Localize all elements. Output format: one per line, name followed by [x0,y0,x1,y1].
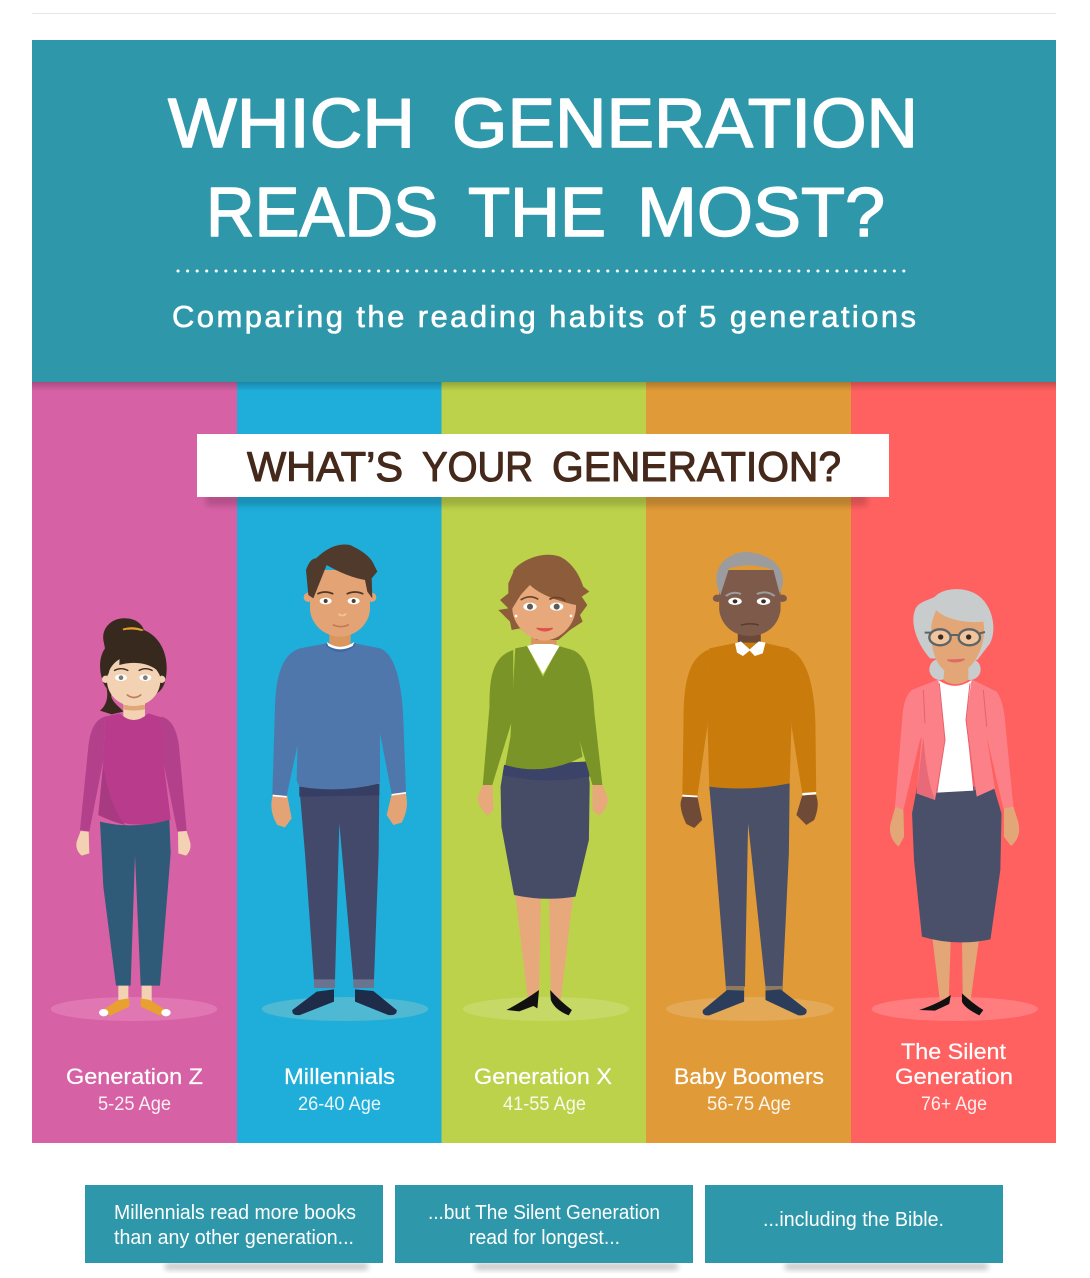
label: The Silent Generation [895,1039,1013,1115]
heading banner: what's your generation: GENERATION? [552,443,841,490]
callout: silent generation read for longest: read for longest... [469,1227,620,1249]
callout: silent generation read for longest [395,1185,693,1270]
label: Generation Z: Generation Z [66,1064,203,1089]
title: THE [468,173,606,251]
heading banner: what's your generation: WHAT’S [247,443,403,490]
label: Generation X [474,1064,612,1115]
woman head [498,555,589,641]
figure: Generation X woman [463,555,629,1021]
silent woman legs and skirt [872,787,1038,1021]
label: The Silent Generation: 76+ Age [921,1094,987,1115]
panel: generation colour bands [32,382,1056,1143]
label: Millennials: Millennials [284,1064,395,1089]
label: Baby Boomers: Baby Boomers [674,1064,824,1089]
subtitle: Comparing the reading habits of 5 generations [172,299,916,334]
label: The Silent Generation: Generation [895,1064,1013,1089]
label: Generation X: 41-55 Age [503,1094,586,1115]
label: Baby Boomers: 56-75 Age [707,1094,791,1115]
label: Baby Boomers [674,1064,824,1115]
label: Generation Z: 5-25 Age [98,1094,171,1115]
figure: Baby Boomer man [666,552,834,1021]
title: GENERATION [452,84,918,162]
heading banner: what's your generation: YOUR [422,443,533,490]
title: WHICH [168,84,415,162]
callout: silent generation read for longest: ...but The Silent Generation [428,1202,660,1224]
callout: millennials read more books [85,1185,383,1270]
title [168,84,918,251]
woman body [463,633,629,1021]
label: Generation Z [66,1064,203,1115]
panel: header [32,40,1056,382]
title: MOST? [637,173,885,251]
heading banner: what's your generation [197,434,889,506]
figure: Generation Z girl [51,618,217,1021]
silent woman torso and head [895,589,1013,810]
label: Millennials: 26-40 Age [298,1094,381,1115]
figure: Silent Generation woman [872,589,1038,1021]
label: The Silent Generation: The Silent [901,1039,1006,1064]
callout: millennials read more books: Millennials read more books [114,1202,356,1224]
callout: including the Bible: ...including the Bible. [763,1209,944,1231]
figure: Millennial man [262,544,428,1021]
callout: including the Bible [705,1185,1003,1270]
callout: millennials read more books: than any other generation... [114,1227,354,1249]
label: Millennials [284,1064,395,1115]
label: Generation X: Generation X [474,1064,612,1089]
title: READS [206,173,438,251]
